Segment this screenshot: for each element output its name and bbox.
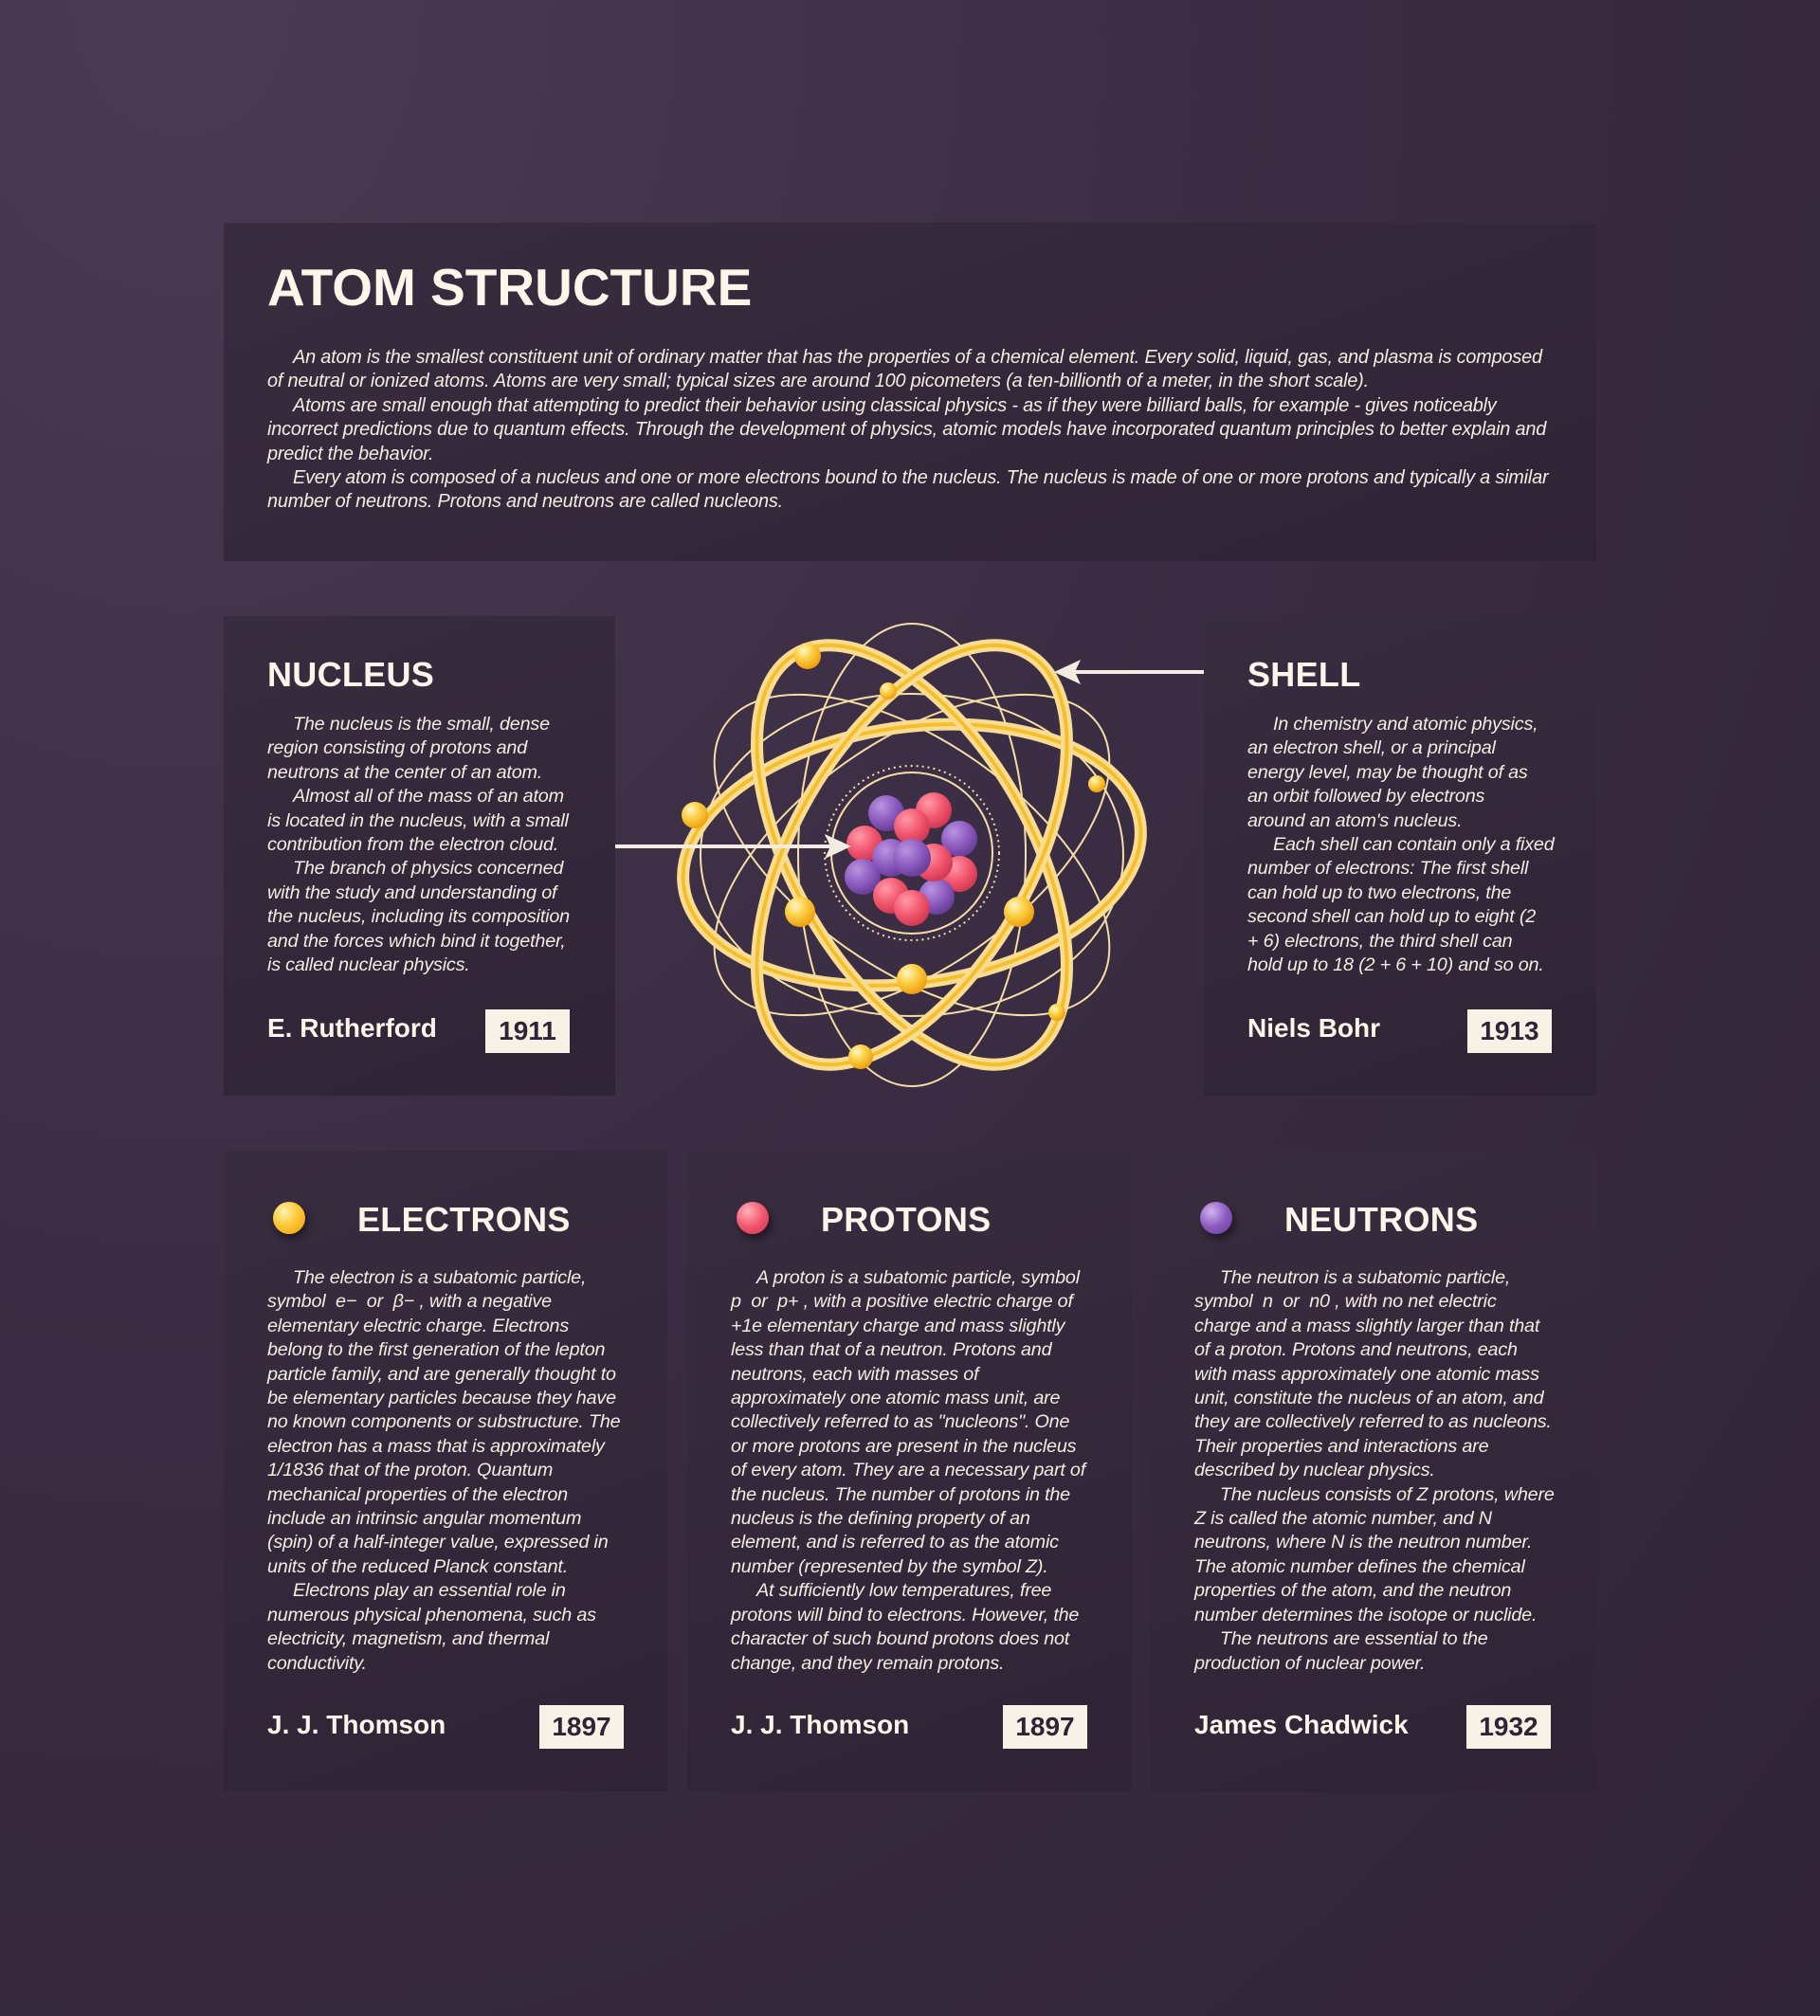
text block: intro: number of neutrons. Protons and neutrons are called nucleons.: [267, 491, 783, 512]
text block: electrons: elementary electric charge. Electrons: [267, 1316, 569, 1336]
text block: shell: energy level, may be thought of as: [1247, 762, 1528, 783]
text block: shell: an orbit followed by electrons: [1247, 786, 1484, 807]
text block: nucleus: is called nuclear physics.: [267, 954, 470, 975]
text block: neutrons: with mass approximately one atomic mass: [1194, 1364, 1539, 1385]
text block: intro: predict the behavior.: [267, 444, 433, 464]
text block: protons: p or p+ , with a positive electric charge of: [731, 1291, 1073, 1312]
year badge: 1897: [552, 1712, 611, 1741]
text block: protons: At sufficiently low temperatures, free: [756, 1580, 1051, 1601]
text block: shell: In chemistry and atomic physics,: [1273, 714, 1538, 735]
text block: electrons: (spin) of a half-integer value, expressed in: [267, 1532, 609, 1553]
year badge: 1932: [1479, 1712, 1538, 1741]
text block: protons: the nucleus. The number of protons in the: [731, 1484, 1070, 1505]
text block: electrons: belong to the first generation of the lepton: [267, 1339, 605, 1360]
year badge: [1466, 1705, 1551, 1749]
text block: nucleus: with the study and understanding of: [267, 882, 556, 903]
text block: neutrons: The atomic number defines the chemical: [1194, 1556, 1525, 1577]
heading: neutrons: NEUTRONS: [1284, 1200, 1478, 1239]
year badge: [1003, 1705, 1087, 1749]
thick orbit ribbons: [666, 594, 1157, 1116]
text block: nucleus: [267, 714, 570, 975]
text block: intro: Every atom is composed of a nucleus and one or more electrons bound to the nucleus. The nucleus is made of one or more protons and typically a similar: [293, 467, 1548, 488]
text block: neutrons: number determines the isotope or nuclide.: [1194, 1605, 1537, 1626]
year badge: 1911: [499, 1016, 556, 1045]
text block: intro: of neutral or ionized atoms. Atoms are very small; typical sizes are around 100 picometers (a ten-billionth of a meter, in the short scale).: [267, 371, 1369, 391]
text block: neutrons: The neutrons are essential to the: [1220, 1628, 1488, 1649]
text block: neutrons: neutrons, where N is the neutron number.: [1194, 1532, 1532, 1553]
text block: nucleus: The branch of physics concerned: [293, 858, 563, 879]
text block: electrons: no known components or substructure. The: [267, 1411, 620, 1432]
thin orbits: [661, 624, 1163, 1086]
text block: shell: [1247, 714, 1555, 975]
text block: neutrons: of a proton. Protons and neutrons, each: [1194, 1339, 1518, 1360]
icon: electron: [273, 1202, 305, 1234]
text block: electrons: include an intrinsic angular momentum: [267, 1508, 581, 1529]
year badge: 1913: [1480, 1016, 1539, 1045]
text block: shell: around an atom's nucleus.: [1247, 810, 1462, 831]
text block: electrons: units of the reduced Planck constant.: [267, 1556, 568, 1577]
nucleus rings: [825, 766, 999, 940]
text block: electrons: electricity, magnetism, and thermal: [267, 1628, 549, 1649]
text block: protons: A proton is a subatomic particle, symbol: [756, 1267, 1080, 1288]
year badge: [539, 1705, 624, 1749]
text block: neutrons: charge and a mass slightly larger than that: [1194, 1316, 1539, 1336]
text block: protons: [730, 1267, 1087, 1674]
panel: protons: [687, 1151, 1132, 1791]
text block: neutrons: The nucleus consists of Z protons, where: [1220, 1484, 1555, 1505]
text block: electrons: mechanical properties of the electron: [267, 1484, 568, 1505]
heading: shell: SHELL: [1247, 655, 1361, 694]
text block: neutrons: Their properties and interactions are: [1194, 1436, 1488, 1457]
text block: shell: Each shell can contain only a fixed: [1273, 834, 1555, 855]
footer name: J. J. Thomson: [267, 1710, 446, 1739]
text block: nucleus: The nucleus is the small, dense: [293, 714, 550, 735]
panel: neutrons: [1151, 1151, 1596, 1791]
arrow: to nucleus: [615, 834, 851, 859]
text block: electrons: symbol e− or β− , with a negative: [267, 1291, 552, 1312]
text block: nucleus: Almost all of the mass of an atom: [293, 786, 564, 807]
text block: shell: can hold up to two electrons, the: [1247, 882, 1511, 903]
text block: protons: of every atom. They are a necessary part of: [731, 1460, 1085, 1480]
text block: shell: number of electrons: The first shell: [1247, 858, 1528, 879]
text block: nucleus: the nucleus, including its composition: [267, 906, 570, 927]
year badge: [485, 1009, 570, 1053]
text block: electrons: be elementary particles because they have: [267, 1388, 616, 1408]
text block: electrons: 1/1836 that of the proton. Quantum: [267, 1460, 553, 1480]
panel: nucleus: [224, 616, 615, 1096]
year badge: [1467, 1009, 1552, 1053]
nucleus cluster: [845, 792, 977, 926]
year badge: 1897: [1015, 1712, 1075, 1741]
text block: neutrons: production of nuclear power.: [1194, 1653, 1425, 1674]
text block: protons: number (represented by the symbol Z).: [731, 1556, 1048, 1577]
footer name: Niels Bohr: [1247, 1013, 1380, 1043]
text block: neutrons: Z is called the atomic number, and N: [1194, 1508, 1492, 1529]
text block: protons: character of such bound protons does not: [731, 1628, 1069, 1649]
text block: protons: or more protons are present in the nucleus: [731, 1436, 1076, 1457]
text block: intro: [267, 347, 1549, 512]
text block: protons: element, and is referred to as the atomic: [731, 1532, 1059, 1553]
text block: nucleus: contribution from the electron cloud.: [267, 834, 558, 855]
text block: protons: approximately one atomic mass unit, are: [731, 1388, 1060, 1408]
heading: electrons: ELECTRONS: [357, 1200, 571, 1239]
text block: electrons: conductivity.: [267, 1653, 367, 1674]
text block: neutrons: they are collectively referred to as nucleons.: [1194, 1411, 1552, 1432]
text block: neutrons: [1194, 1267, 1555, 1674]
icon: neutron: [1200, 1202, 1232, 1234]
text block: electrons: particle family, and are generally thought to: [267, 1364, 616, 1385]
text block: protons: protons will bind to electrons. However, the: [731, 1605, 1079, 1626]
text block: shell: second shell can hold up to eight (2: [1247, 906, 1536, 927]
text block: electrons: [267, 1267, 620, 1674]
panel: electrons: [224, 1151, 667, 1791]
text block: neutrons: symbol n or n0 , with no net electric: [1194, 1291, 1497, 1312]
text block: shell: + 6) electrons, the third shell can: [1247, 931, 1512, 952]
text block: neutrons: The neutron is a subatomic particle,: [1220, 1267, 1510, 1288]
text block: nucleus: and the forces which bind it together,: [267, 931, 566, 952]
footer name: E. Rutherford: [267, 1013, 437, 1043]
arrow: to shell: [1054, 660, 1204, 684]
heading: nucleus: NUCLEUS: [267, 655, 434, 694]
text block: neutrons: described by nuclear physics.: [1194, 1460, 1435, 1480]
text block: shell: hold up to 18 (2 + 6 + 10) and so on.: [1247, 954, 1544, 975]
panel: shell: [1204, 616, 1596, 1096]
text block: intro: Atoms are small enough that attempting to predict their behavior using classical physics - as if they were billiard balls, for example - gives noticeably: [293, 395, 1497, 416]
text block: protons: nucleus is the defining property of an: [731, 1508, 1030, 1529]
title: ATOM STRUCTURE: [267, 258, 752, 317]
atom diagram: [615, 623, 1204, 1087]
text block: protons: neutrons, each with masses of: [731, 1364, 978, 1385]
text block: protons: collectively referred to as "nucleons". One: [731, 1411, 1069, 1432]
footer name: James Chadwick: [1194, 1710, 1409, 1739]
text block: nucleus: is located in the nucleus, with a small: [267, 810, 569, 831]
icon: proton: [737, 1202, 769, 1234]
text block: electrons: The electron is a subatomic particle,: [293, 1267, 586, 1288]
text block: nucleus: region consisting of protons and: [267, 737, 527, 758]
panel: intro: [224, 223, 1596, 561]
text block: electrons: Electrons play an essential role in: [293, 1580, 566, 1601]
text block: nucleus: neutrons at the center of an atom.: [267, 762, 542, 783]
footer name: J. J. Thomson: [731, 1710, 909, 1739]
text block: protons: change, and they remain protons.: [731, 1653, 1004, 1674]
text block: intro: An atom is the smallest constituent unit of ordinary matter that has the properties of a chemical element. Every solid, liquid, gas, and plasma is composed: [293, 347, 1542, 368]
text block: protons: less than that of a neutron. Protons and: [731, 1339, 1051, 1360]
heading: protons: PROTONS: [821, 1200, 991, 1239]
text block: intro: incorrect predictions due to quantum effects. Through the development of physics, atomic models have incorporated quantum principles to better explain and: [267, 419, 1546, 440]
electrons: [682, 643, 1105, 1069]
text block: neutrons: unit, constitute the nucleus of an atom, and: [1194, 1388, 1543, 1408]
text block: electrons: electron has a mass that is approximately: [267, 1436, 605, 1457]
text block: neutrons: properties of the atom, and the neutron: [1194, 1580, 1511, 1601]
text block: shell: an electron shell, or a principal: [1247, 737, 1496, 758]
text block: protons: +1e elementary charge and mass slightly: [731, 1316, 1065, 1336]
text block: electrons: numerous physical phenomena, such as: [267, 1605, 596, 1626]
